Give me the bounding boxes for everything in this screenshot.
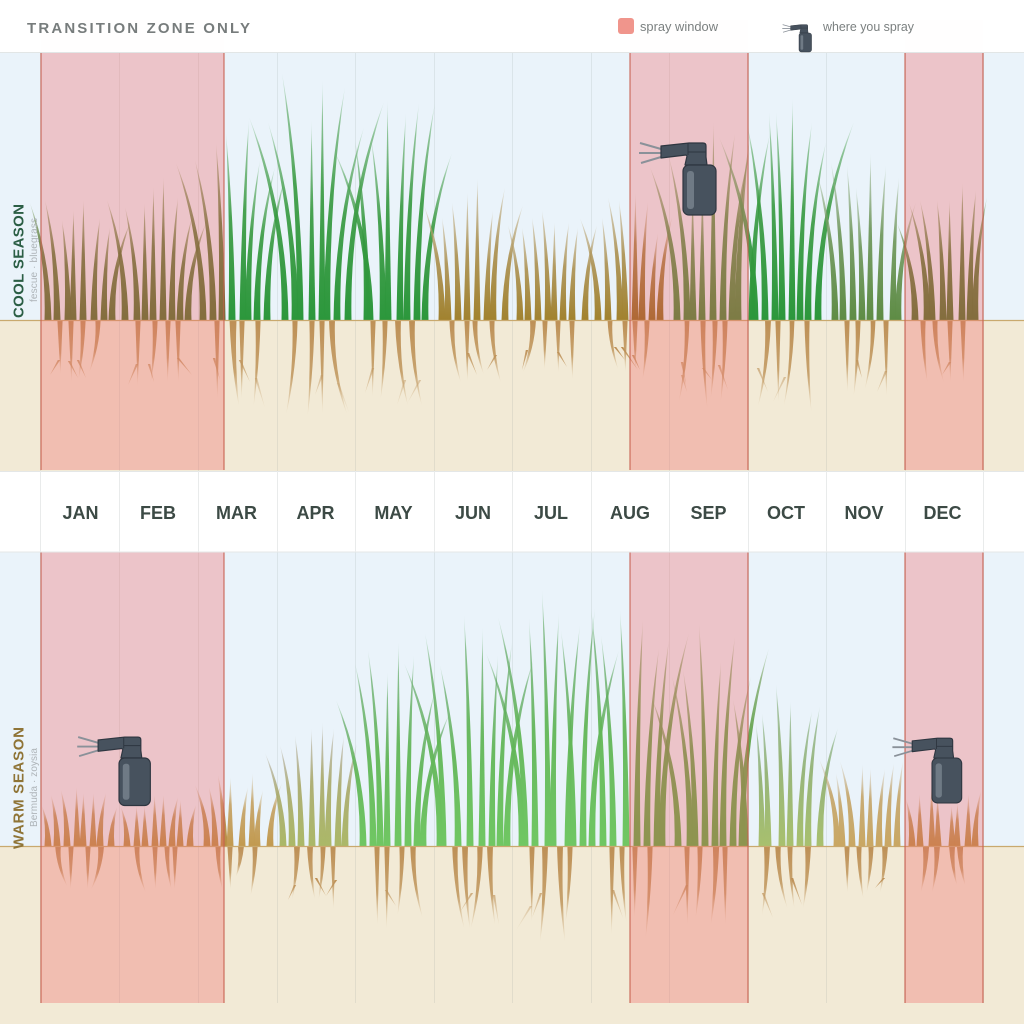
panel: cool season sky: [0, 52, 1024, 320]
legend: where you spray: [782, 19, 914, 52]
month labels: JUL: [534, 503, 568, 523]
blades: October, pale green: [756, 684, 838, 846]
spray window: late August to September, cool season: [630, 20, 748, 470]
blades: May to August, bright green: [336, 590, 630, 846]
blades: March, tan: [226, 773, 282, 846]
icon: sprayer, cool season: [639, 143, 716, 215]
blades: December, dormant olive: [897, 183, 987, 320]
blades: January, dormant olive: [30, 200, 130, 320]
title: TRANSITION ZONE ONLY: [27, 20, 250, 37]
month labels: FEB: [140, 503, 176, 523]
legend: spray window: spray window: [640, 19, 719, 34]
blades: August, scorched: [632, 193, 672, 320]
spray window: December, warm season: [905, 552, 983, 1003]
month labels: SEP: [690, 503, 727, 523]
label: cool season grass types: fescue · bluegrass: [29, 218, 40, 302]
panel: cool season soil: [0, 320, 1024, 471]
month labels: JAN: [62, 503, 99, 523]
legend: where you spray: where you spray: [822, 19, 914, 34]
blades: September, mid green: [634, 619, 769, 846]
spray window: late August to September, warm season: [630, 552, 748, 1003]
panel: warm season sky: [0, 552, 1024, 846]
cool season roots: [50, 320, 966, 417]
blades: February, dormant olive: [107, 143, 226, 320]
label: warm season grass types: Bermuda · zoysia: [29, 748, 40, 827]
month labels: [62, 503, 962, 523]
blades: November, pale tan: [819, 759, 903, 846]
spray window: December, cool season: [905, 20, 983, 470]
header strip: [0, 0, 1024, 52]
panel: warm season soil: [0, 846, 1024, 1024]
label: warm season: WARM SEASON: [10, 727, 28, 849]
month strip: [0, 471, 1024, 552]
month labels: MAY: [374, 503, 413, 523]
spray window: January to mid March, warm season: [41, 552, 224, 1003]
icon: sprayer, warm season right: [892, 738, 962, 803]
month labels: OCT: [767, 503, 805, 523]
spray window: January to mid March, cool season: [41, 20, 224, 470]
warm season grass: [42, 590, 981, 846]
blades: November, fading green: [817, 153, 916, 320]
blades: January, dormant tan: [42, 787, 117, 846]
month labels: APR: [296, 503, 335, 523]
month labels: DEC: [923, 503, 962, 523]
blades: February, dormant tan: [121, 775, 228, 846]
blades: June and July, tan: [424, 178, 628, 320]
label: cool season: COOL SEASON: [10, 204, 28, 318]
cool season grass: [30, 73, 987, 320]
month labels: AUG: [610, 503, 650, 523]
icon: sprayer, warm season left: [77, 737, 150, 806]
month labels: MAR: [216, 503, 257, 523]
blades: April, olive green: [265, 722, 357, 846]
blades: March to May, deep green: [226, 73, 452, 320]
blades: September, recovering green: [650, 122, 750, 320]
month labels: JUN: [455, 503, 491, 523]
blades: October, deep green: [719, 98, 854, 320]
warm season roots: [55, 846, 965, 943]
blades: December, dormant tan: [906, 786, 981, 846]
month labels: NOV: [844, 503, 884, 523]
